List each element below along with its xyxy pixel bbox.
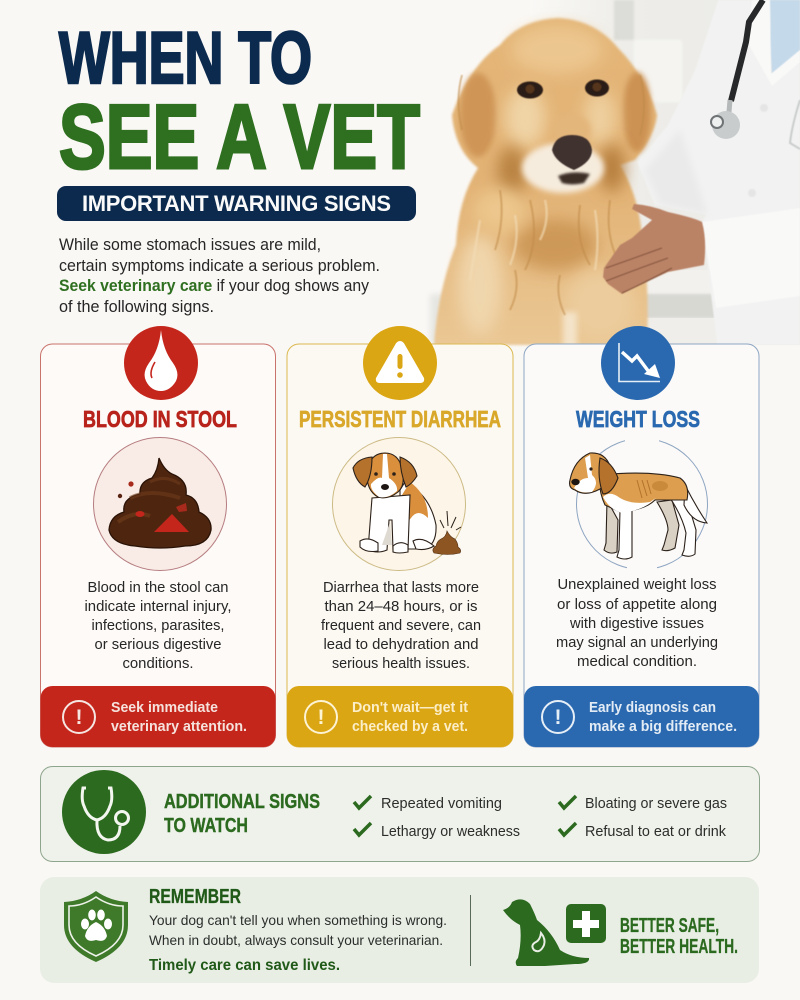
description: or serious digestive: [94, 636, 222, 653]
heading: [164, 791, 320, 837]
callout: !: [554, 706, 562, 729]
text block: REMEMBER: [149, 886, 241, 908]
checklist: Bloating or severe gas: [585, 795, 727, 812]
intro text: While some stomach issues are mild,: [59, 236, 321, 254]
callout: !: [318, 706, 324, 729]
checklist: Lethargy or weakness: [381, 823, 520, 840]
checklist: Repeated vomiting: [381, 795, 502, 812]
panel: remember: [40, 877, 759, 983]
description: with digestive issues: [569, 615, 704, 632]
small stool: [433, 531, 461, 554]
callout: [40, 686, 276, 747]
heading: ADDITIONAL SIGNS: [164, 791, 320, 813]
subtitle banner: [57, 186, 416, 221]
slogan: BETTER HEALTH.: [620, 936, 738, 958]
clinic background: [430, 0, 800, 348]
icon: dog silhouette with stomach: [503, 899, 589, 966]
icon: paw shield: [64, 891, 128, 962]
dog: [353, 453, 436, 553]
callout: !: [76, 706, 82, 729]
divider: [470, 895, 471, 966]
head: [570, 453, 610, 493]
text block: Your dog can't tell you when something is wrong.: [149, 912, 447, 928]
panel: additional signs: [40, 766, 760, 862]
intro text: Seek veterinary care if your dog shows any: [59, 277, 370, 295]
hero photo: golden retriever with vet: [430, 0, 800, 348]
title: [59, 18, 420, 188]
illustration: sitting dog with stool: [332, 438, 466, 570]
description: [84, 579, 232, 672]
title: SEE A VET: [59, 87, 420, 188]
icon: blood drop: [124, 326, 198, 400]
card: weight loss: [524, 326, 759, 747]
stethoscope: [711, 0, 763, 139]
description: conditions.: [122, 655, 194, 672]
illustration: thin dog: [570, 434, 708, 574]
eyes: [517, 80, 609, 98]
description: Unexplained weight loss: [558, 576, 716, 593]
description: [556, 576, 718, 670]
callout: [287, 686, 513, 747]
intro text: [59, 236, 380, 316]
text block: Timely care can save lives.: [149, 957, 340, 974]
dog silhouette: [434, 18, 657, 348]
callout: veterinary attention.: [111, 718, 247, 735]
description: serious health issues.: [332, 655, 470, 672]
intro text: of the following signs.: [59, 298, 214, 316]
callout: Seek immediate: [111, 699, 218, 716]
heading: PERSISTENT DIARRHEA: [299, 406, 501, 432]
card: blood in stool: [40, 326, 276, 747]
description: than 24–48 hours, or is: [324, 598, 478, 615]
description: may signal an underlying: [556, 634, 718, 651]
icon: warning triangle: [363, 326, 437, 400]
slogan: [620, 915, 738, 958]
intro text: certain symptoms indicate a serious problem.: [59, 257, 380, 275]
description: [321, 579, 481, 672]
body: [600, 473, 688, 512]
callout: Don't wait—get it: [352, 699, 468, 716]
heading: WEIGHT LOSS: [576, 406, 700, 432]
text block: [149, 886, 447, 974]
illustration: stool with blood: [94, 438, 226, 570]
description: indicate internal injury,: [84, 598, 232, 615]
nose: [552, 135, 592, 170]
heading: TO WATCH: [164, 815, 248, 837]
icon: stethoscope: [62, 770, 146, 854]
checklist: Refusal to eat or drink: [585, 823, 726, 840]
title: WHEN TO: [59, 18, 312, 99]
callout: checked by a vet.: [352, 718, 468, 735]
subtitle banner: IMPORTANT WARNING SIGNS: [82, 191, 391, 216]
checklist: [354, 795, 727, 840]
callout: make a big difference.: [589, 718, 737, 735]
description: or loss of appetite along: [557, 596, 717, 613]
card: persistent diarrhea: [287, 326, 513, 747]
dog face: [517, 80, 609, 193]
vet hand: [603, 204, 705, 294]
legs: [604, 500, 618, 553]
text block: When in doubt, always consult your veterinarian.: [149, 932, 443, 948]
callout: [524, 686, 759, 747]
description: infections, parasites,: [92, 617, 224, 634]
description: lead to dehydration and: [324, 636, 478, 653]
description: Blood in the stool can: [88, 579, 228, 596]
callout: Early diagnosis can: [589, 699, 716, 716]
description: medical condition.: [577, 653, 697, 670]
icon: falling chart: [601, 326, 675, 400]
icon: medical cross: [566, 904, 606, 943]
description: frequent and severe, can: [321, 617, 481, 634]
tail: [684, 485, 707, 523]
description: Diarrhea that lasts more: [323, 579, 479, 596]
slogan: BETTER SAFE,: [620, 915, 719, 937]
heading: BLOOD IN STOOL: [83, 406, 237, 432]
vet coat: [637, 0, 800, 345]
fur shading: [460, 73, 496, 157]
